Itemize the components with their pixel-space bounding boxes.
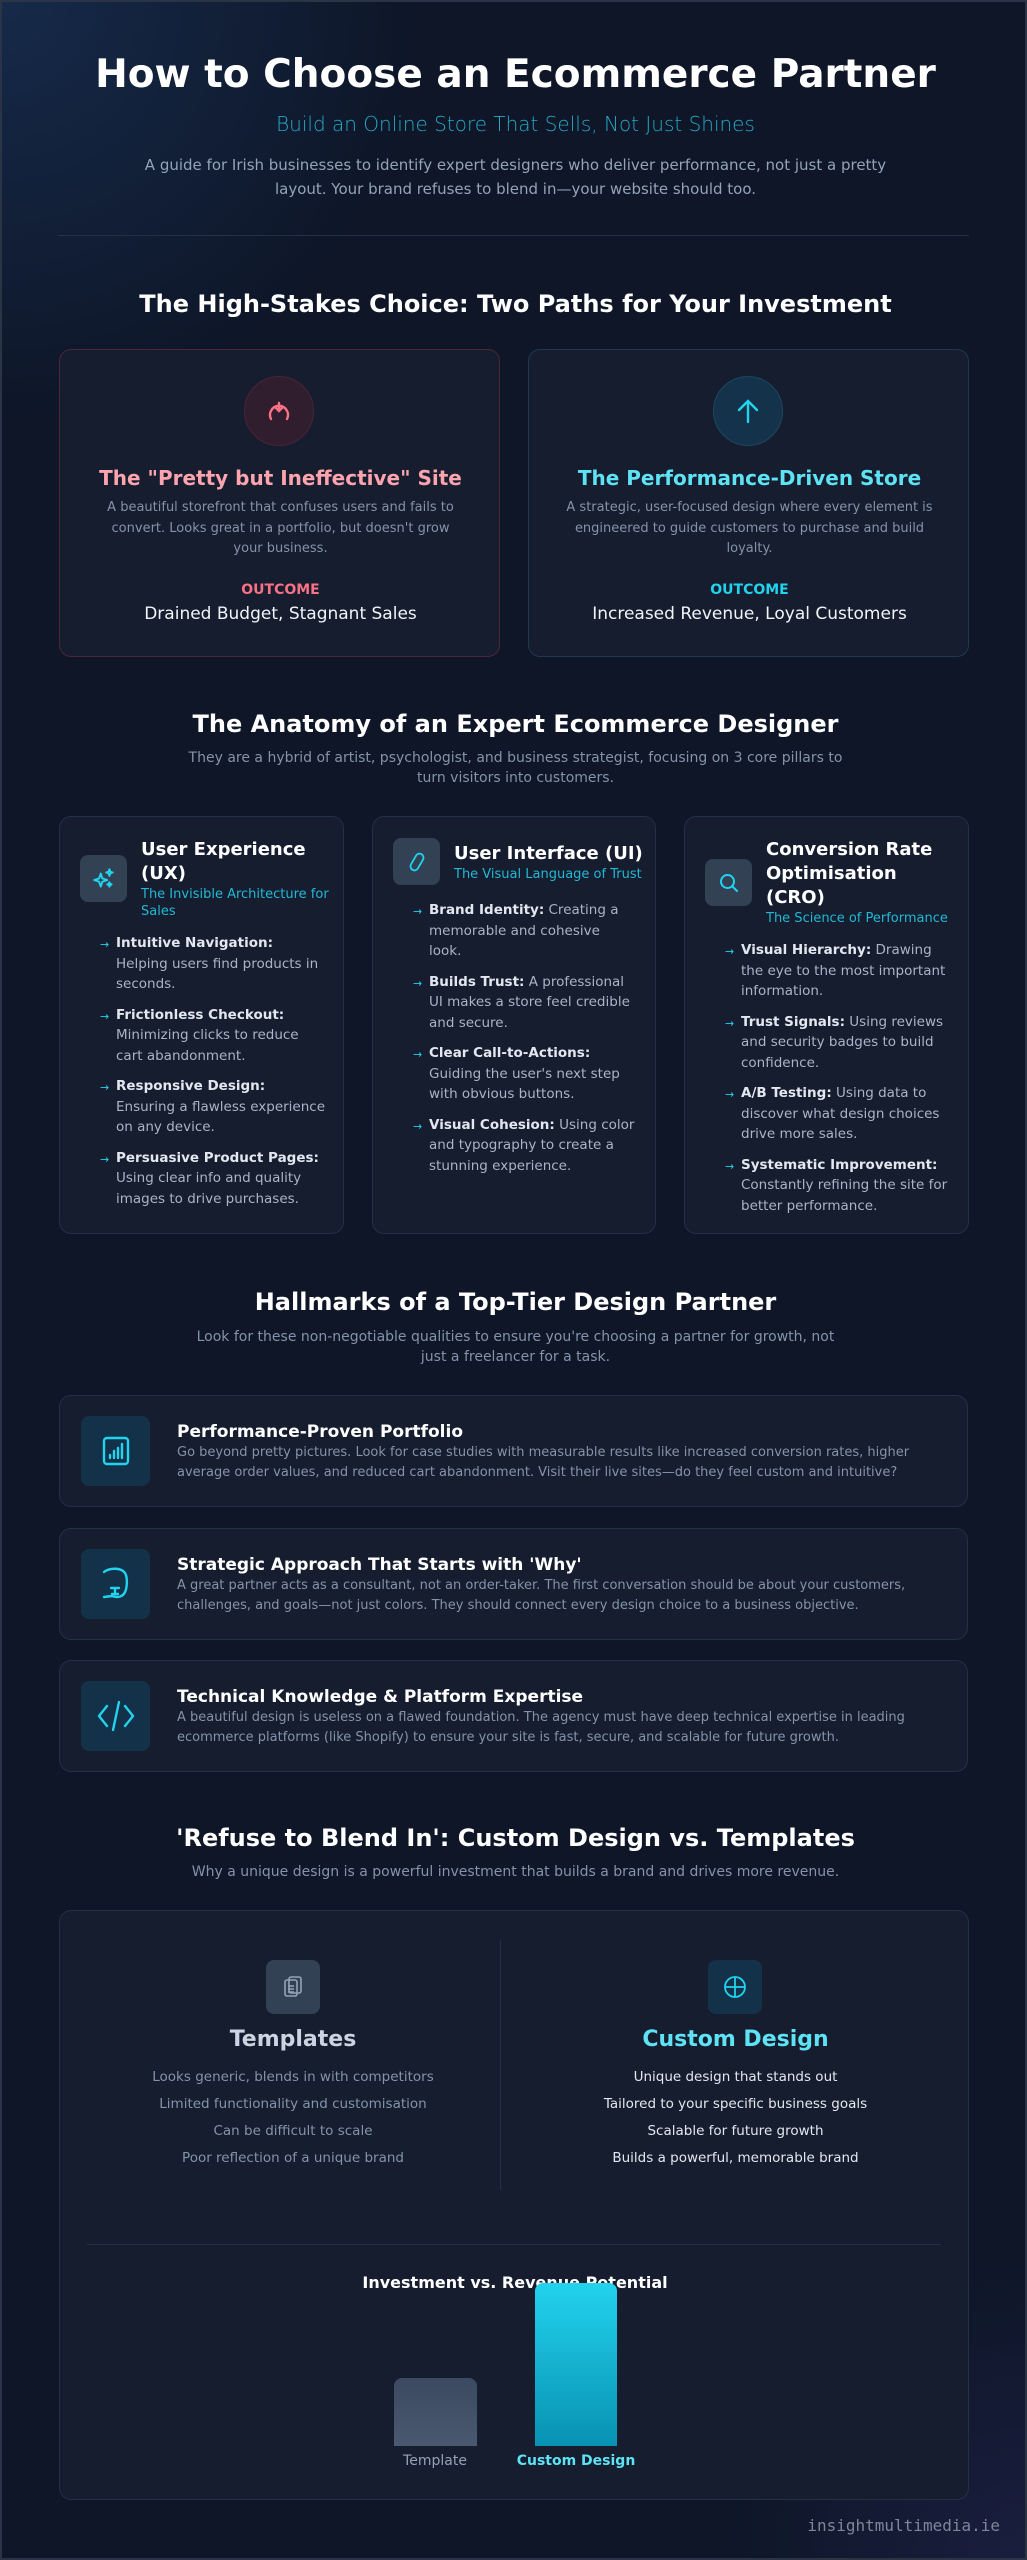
panel: portfolio: Performance-Proven Portfolio: [177, 1422, 463, 1442]
heading: anatomy: The Anatomy of an Expert Ecommerce Designer: [192, 710, 839, 738]
CRO header: The Science of Performance: [766, 911, 948, 926]
card title: The Performance-Driven Store: [578, 466, 921, 490]
UX list: Persuasive Product Pages:: [116, 1150, 319, 1166]
panel: portfolio: [59, 1395, 968, 1507]
outcome: [144, 582, 417, 624]
icon: code: [81, 1681, 150, 1751]
bar chart: [362, 2273, 668, 2469]
UI header: The Visual Language of Trust: [454, 867, 642, 882]
outcome: [592, 582, 907, 624]
bar: custom: [535, 2283, 617, 2446]
CRO list: Trust Signals: Using reviews and security badges to build confidence.: [741, 1014, 943, 1070]
panel: technical knowledge: [59, 1660, 968, 1772]
templates list: Poor reflection of a unique brand: [182, 2150, 404, 2166]
templates list: Looks generic, blends in with competitors: [152, 2069, 434, 2085]
hallmarks subtitle: Look for these non-negotiable qualities to ensure you're choosing a partner for growth, not just a freelancer for a task.: [197, 1329, 834, 1365]
UI list: Brand Identity: Creating a memorable and cohesive look.: [429, 902, 619, 959]
custom list: Tailored to your specific business goals: [604, 2096, 867, 2112]
panel: performance-driven: [528, 349, 969, 657]
UX list: Intuitive Navigation:: [116, 935, 273, 951]
custom list: [604, 2069, 867, 2166]
UX header: The Invisible Architecture for Sales: [141, 887, 329, 919]
card description: A strategic, user-focused design where every element is engineered to guide customers to purchase and build loyalty.: [566, 500, 933, 556]
title: How to Choose an Ecommerce Partner: [95, 52, 936, 97]
panel: UI: [372, 816, 656, 1234]
templates list: Can be difficult to scale: [213, 2123, 373, 2139]
CRO list: A/B Testing: Using data to discover what design choices drive more sales.: [741, 1085, 939, 1142]
UX list: Helping users find products in seconds.: [116, 956, 318, 992]
UI header: [454, 843, 643, 882]
panel: UX: [59, 816, 344, 1234]
heading: two paths: The High-Stakes Choice: Two Paths for Your Investment: [139, 290, 892, 318]
comparison subtitle: Why a unique design is a powerful investment that builds a brand and drives more revenue.: [192, 1864, 839, 1880]
UI header: User Interface (UI): [454, 843, 643, 864]
panel: strategic approach: A great partner acts as a consultant, not an order-taker. The first conversation should be about your customers, challenges, and goals—not just colors. They should connect every design choice to a business objective.: [177, 1578, 905, 1613]
icon: up arrow: [713, 376, 783, 446]
custom list: Builds a powerful, memorable brand: [612, 2150, 859, 2166]
icon: clipboard: [266, 1960, 320, 2014]
UX list: Using clear info and quality images to drive purchases.: [116, 1170, 301, 1206]
UX list: Responsive Design:: [116, 1078, 265, 1094]
templates list: Limited functionality and customisation: [159, 2096, 427, 2112]
heading: hallmarks: Hallmarks of a Top-Tier Design Partner: [255, 1288, 776, 1316]
CRO list: Visual Hierarchy: Drawing the eye to the most important information.: [741, 942, 945, 999]
bar chart: Investment vs. Revenue Potential: [362, 2273, 668, 2292]
custom list: Unique design that stands out: [634, 2069, 837, 2085]
CRO list: Systematic Improvement: Constantly refining the site for better performance.: [741, 1156, 947, 1214]
CRO list: [726, 942, 948, 1214]
bar chart: Template: [403, 2453, 467, 2469]
intro text: A guide for Irish businesses to identify expert designers who deliver performance, not just a pretty layout. Your brand refuses to blend in—your website should too.: [145, 156, 886, 198]
icon: sparkles: [80, 855, 127, 902]
templates list: [152, 2069, 434, 2166]
panel: technical knowledge: A beautiful design is useless on a flawed foundation. The agency must have deep technical expertise in leading ecommerce platforms (like Shopify) to ensure your site is fast, secure, and scalable for future growth.: [177, 1710, 905, 1745]
panel: comparison: Templates: [230, 2027, 356, 2052]
UX header: [140, 839, 329, 919]
CRO header: Conversion Rate Optimisation (CRO): [766, 839, 932, 908]
anatomy subtitle: They are a hybrid of artist, psychologist, and business strategist, focusing on 3 core pillars to turn visitors into customers.: [189, 750, 842, 786]
column: templates: [152, 1960, 434, 2166]
outcome: Drained Budget, Stagnant Sales: [144, 604, 417, 624]
UX list: Ensuring a flawless experience on any device.: [116, 1098, 325, 1135]
outcome: OUTCOME: [241, 582, 320, 598]
subtitle: Build an Online Store That Sells, Not Just Shines: [276, 112, 755, 136]
UX list: Frictionless Checkout:: [116, 1006, 284, 1022]
footer: insightmultimedia.ie: [807, 2516, 1000, 2535]
UI list: Visual Cohesion: Using color and typography to create a stunning experience.: [429, 1116, 634, 1174]
icon: broken gauge: [244, 376, 314, 446]
panel: technical knowledge: Technical Knowledge & Platform Expertise: [177, 1687, 583, 1707]
UX list: Minimizing clicks to reduce cart abandonment.: [116, 1027, 299, 1064]
outcome: Increased Revenue, Loyal Customers: [592, 604, 907, 624]
icon: pill: [393, 838, 440, 885]
UI list: Builds Trust: A professional UI makes a store feel credible and secure.: [429, 974, 630, 1030]
icon: chart: [81, 1416, 150, 1486]
outcome: OUTCOME: [710, 582, 789, 598]
heading: custom vs templates: 'Refuse to Blend In': Custom Design vs. Templates: [176, 1824, 855, 1852]
column: custom design: [604, 1960, 867, 2166]
UX list: [100, 935, 325, 1206]
UI list: Clear Call-to-Actions: Guiding the user's next step with obvious buttons.: [429, 1045, 620, 1102]
icon: magnifier: [705, 859, 752, 906]
custom list: Scalable for future growth: [647, 2123, 824, 2139]
icon: compass: [708, 1960, 762, 2014]
panel: pretty but ineffective: [59, 349, 500, 657]
panel: comparison: Custom Design: [642, 2027, 829, 2052]
bar chart: Custom Design: [517, 2453, 635, 2469]
UX header: User Experience (UX): [141, 839, 306, 884]
bar: template: [394, 2378, 477, 2446]
panel: comparison: [59, 1910, 969, 2500]
panel: CRO: [684, 816, 969, 1234]
icon: head: [81, 1549, 150, 1619]
panel: strategic approach: [59, 1528, 968, 1640]
card title: The "Pretty but Ineffective" Site: [99, 466, 462, 490]
panel: portfolio: Go beyond pretty pictures. Look for case studies with measurable results like increased conversion rates, higher average order values, and reduced cart abandonment. Visit their live sites—do they feel custom and intuitive?: [177, 1445, 909, 1480]
UI list: [414, 902, 634, 1174]
card description: A beautiful storefront that confuses users and fails to convert. Looks great in a portfolio, but doesn't grow your business.: [107, 500, 454, 556]
panel: strategic approach: Strategic Approach That Starts with 'Why': [177, 1555, 582, 1575]
